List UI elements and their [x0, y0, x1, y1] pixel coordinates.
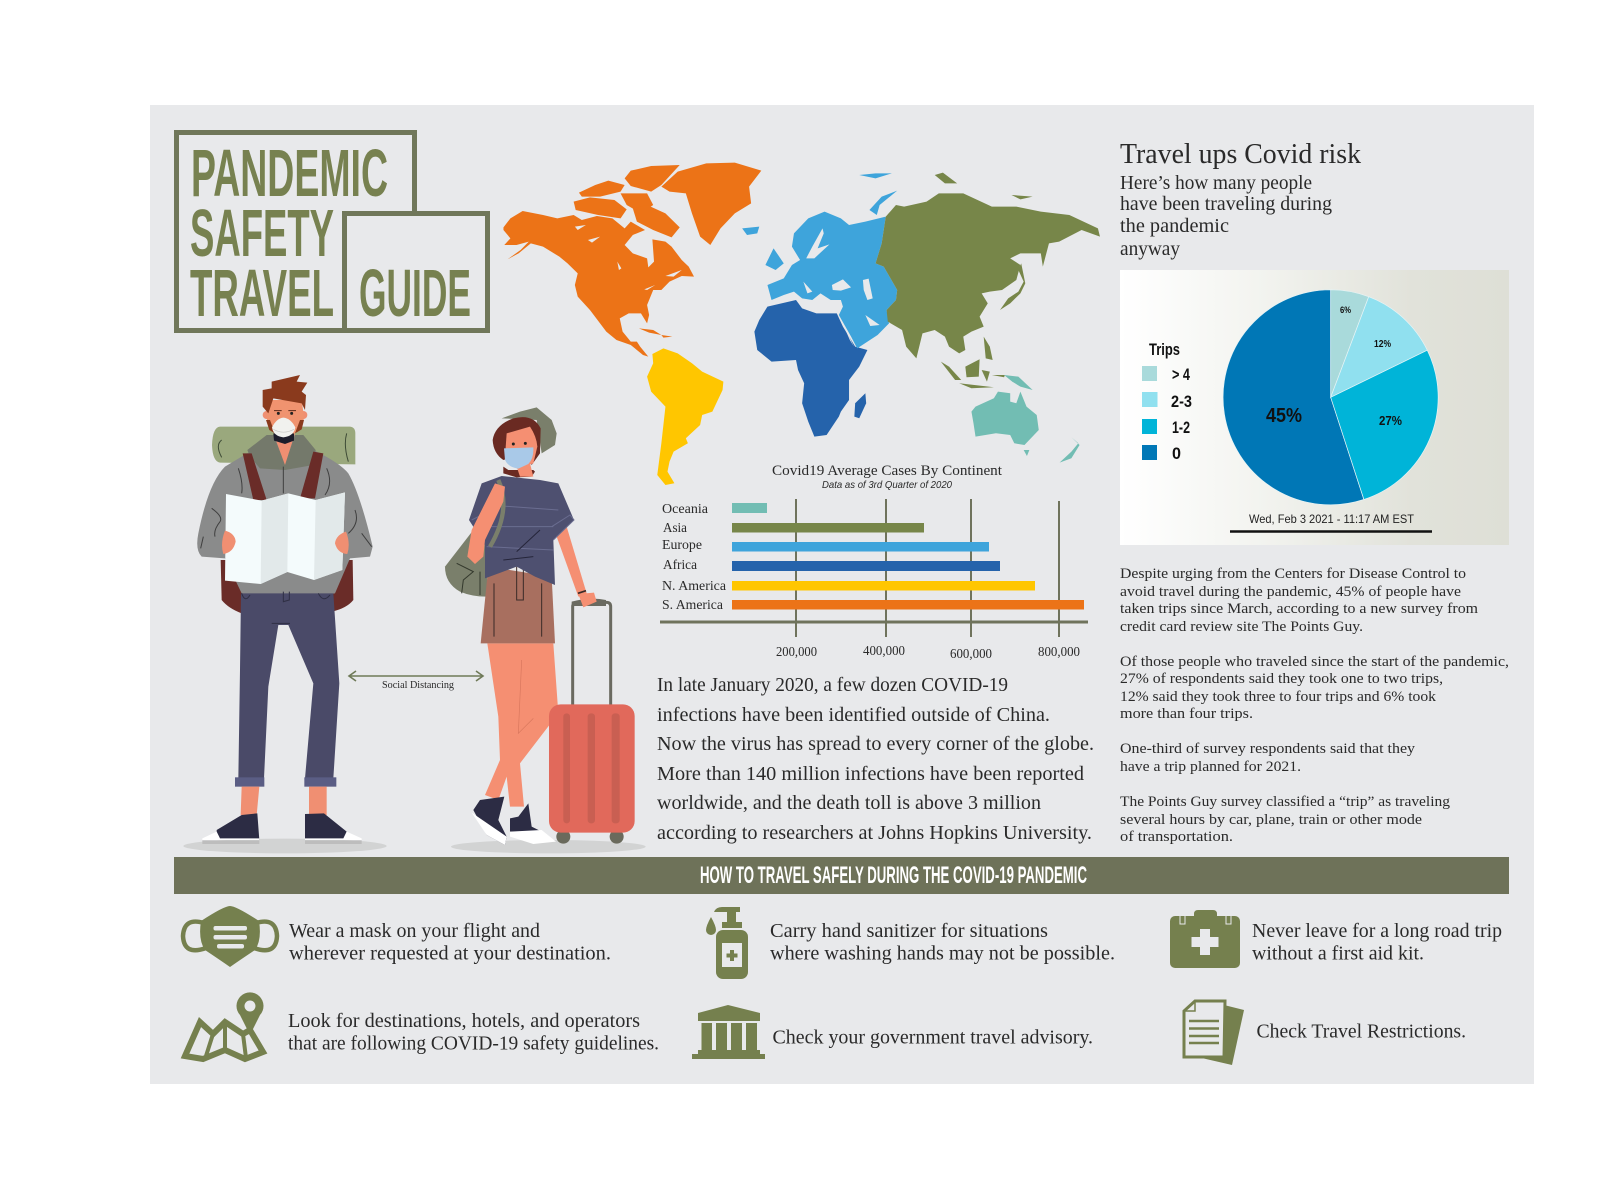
text block: survey details: credit card review site The Points Guy. — [1120, 619, 1363, 635]
bar chart: 400,000 — [863, 643, 905, 658]
bar chart: Africa — [663, 558, 698, 573]
south america — [647, 348, 723, 485]
text block: intro paragraph: In late January 2020, a few dozen COVID-19 — [657, 674, 1008, 696]
chart title: Covid19 Average Cases By Continent — [772, 463, 1003, 479]
text block: intro paragraph: More than 140 million infections have been reported — [657, 763, 1084, 785]
date stamp: Wed, Feb 3 2021 - 11:17 AM EST — [1249, 512, 1415, 526]
asia — [876, 173, 1100, 388]
pie labels: 6% — [1340, 305, 1351, 316]
heading: travel ups covid risk — [1120, 139, 1361, 260]
text block: survey details: One-third of survey respondents said that they — [1120, 741, 1416, 757]
north america — [503, 163, 761, 357]
title block: GUIDE — [359, 256, 471, 331]
chart title: Data as of 3rd Quarter of 2020 — [822, 479, 952, 491]
tip: first aid kit: without a first aid kit. — [1252, 942, 1424, 964]
legend: 1-2 — [1172, 419, 1190, 437]
tip: hand sanitizer: Carry hand sanitizer for situations — [770, 920, 1048, 942]
bar chart: N. America — [662, 579, 727, 594]
bar chart: Oceania — [662, 502, 709, 517]
pie slices — [1223, 290, 1438, 505]
legend: 2-3 — [1171, 393, 1192, 411]
text block: survey details: Of those people who traveled since the start of the pandemic, — [1120, 654, 1509, 670]
heading: travel ups covid risk: Here’s how many people — [1120, 172, 1312, 194]
pie labels: 27% — [1379, 414, 1402, 428]
tip: safety guidelines: Look for destinations, hotels, and operators — [288, 1010, 640, 1032]
tip: wear a mask — [289, 920, 611, 964]
icon: map with pin — [185, 992, 264, 1059]
text block: survey details: taken trips since March, according to a new survey from — [1120, 601, 1478, 617]
text block: intro paragraph: according to researchers at Johns Hopkins University. — [657, 822, 1092, 844]
bar chart: Europe — [662, 538, 702, 553]
tip: travel restrictions: Check Travel Restrictions. — [1256, 1020, 1466, 1042]
text block: survey details: The Points Guy survey classified a “trip” as traveling — [1120, 794, 1451, 810]
banner: HOW TO TRAVEL SAFELY DURING THE COVID-19 PANDEMIC — [700, 862, 1087, 889]
europe — [742, 173, 897, 348]
tip: hand sanitizer — [770, 920, 1115, 964]
tip: safety guidelines — [288, 1010, 659, 1054]
title block: SAFETY — [190, 196, 334, 271]
heading: travel ups covid risk: anyway — [1120, 238, 1180, 260]
pie labels: 45% — [1266, 405, 1302, 427]
bar chart — [660, 499, 1088, 661]
tip: hand sanitizer: where washing hands may not be possible. — [770, 942, 1115, 964]
oceania — [971, 375, 1080, 463]
pie labels — [1266, 305, 1402, 428]
bar chart: S. America — [662, 598, 724, 613]
text block: intro paragraph: infections have been identified outside of China. — [657, 704, 1050, 726]
tip: wear a mask: wherever requested at your destination. — [289, 942, 611, 964]
text block: survey details: avoid travel during the pandemic, 45% of people have — [1120, 584, 1461, 600]
text block: survey details: have a trip planned for 2021. — [1120, 759, 1301, 775]
text block: intro paragraph: worldwide, and the death toll is above 3 million — [657, 792, 1041, 814]
tip: wear a mask: Wear a mask on your flight and — [289, 920, 540, 942]
title block — [176, 132, 488, 331]
heading: travel ups covid risk: have been traveling during — [1120, 193, 1332, 215]
icon: face mask — [183, 906, 277, 967]
bar chart: 600,000 — [950, 646, 992, 661]
tip: safety guidelines: that are following COVID-19 safety guidelines. — [288, 1032, 659, 1054]
inland seas — [803, 228, 880, 347]
bar chart: 800,000 — [1038, 644, 1080, 659]
text block: survey details: more than four trips. — [1120, 706, 1253, 722]
banner — [174, 857, 1509, 894]
text block: intro paragraph — [657, 674, 1094, 844]
text block: survey details: of transportation. — [1120, 829, 1233, 845]
text block: intro paragraph: Now the virus has spread to every corner of the globe. — [657, 733, 1094, 755]
lakes — [575, 225, 682, 290]
text block: survey details: several hours by car, plane, train or other mode — [1120, 812, 1422, 828]
pie labels: 12% — [1374, 338, 1392, 350]
arrow: social distancing — [349, 671, 483, 691]
panel: background — [150, 105, 1534, 1084]
chart title — [772, 463, 1003, 491]
icon: first aid kit — [1170, 910, 1240, 968]
bar chart: Asia — [663, 521, 688, 536]
panel: pie chart — [1120, 270, 1509, 545]
icon: government building — [692, 1005, 765, 1059]
legend: > 4 — [1172, 366, 1191, 384]
legend: 0 — [1172, 445, 1181, 463]
africa — [754, 300, 867, 437]
icon: sanitizer bottle — [706, 907, 748, 979]
illustration: man with map — [183, 375, 387, 853]
text block: survey details: 27% of respondents said they took one to two trips, — [1120, 671, 1443, 687]
bar chart: 200,000 — [776, 644, 817, 659]
arrow: social distancing: Social Distancing — [382, 680, 455, 691]
title block: TRAVEL — [190, 256, 334, 331]
title block: PANDEMIC — [191, 136, 388, 211]
illustration: woman with suitcase — [445, 407, 646, 853]
icon: document — [1184, 1001, 1244, 1065]
legend: Trips — [1149, 341, 1180, 359]
text block: survey details — [1120, 566, 1509, 845]
world map — [503, 163, 1100, 485]
text block: survey details: Despite urging from the Centers for Disease Control to — [1120, 566, 1466, 582]
tip: first aid kit — [1252, 920, 1502, 964]
text block: survey details: 12% said they took three to four trips and 6% took — [1120, 689, 1437, 705]
heading: travel ups covid risk: Travel ups Covid risk — [1120, 139, 1361, 170]
tip: first aid kit: Never leave for a long road trip — [1252, 920, 1502, 942]
tip: travel advisory: Check your government travel advisory. — [772, 1026, 1093, 1048]
legend — [1142, 341, 1192, 463]
heading: travel ups covid risk: the pandemic — [1120, 215, 1229, 237]
